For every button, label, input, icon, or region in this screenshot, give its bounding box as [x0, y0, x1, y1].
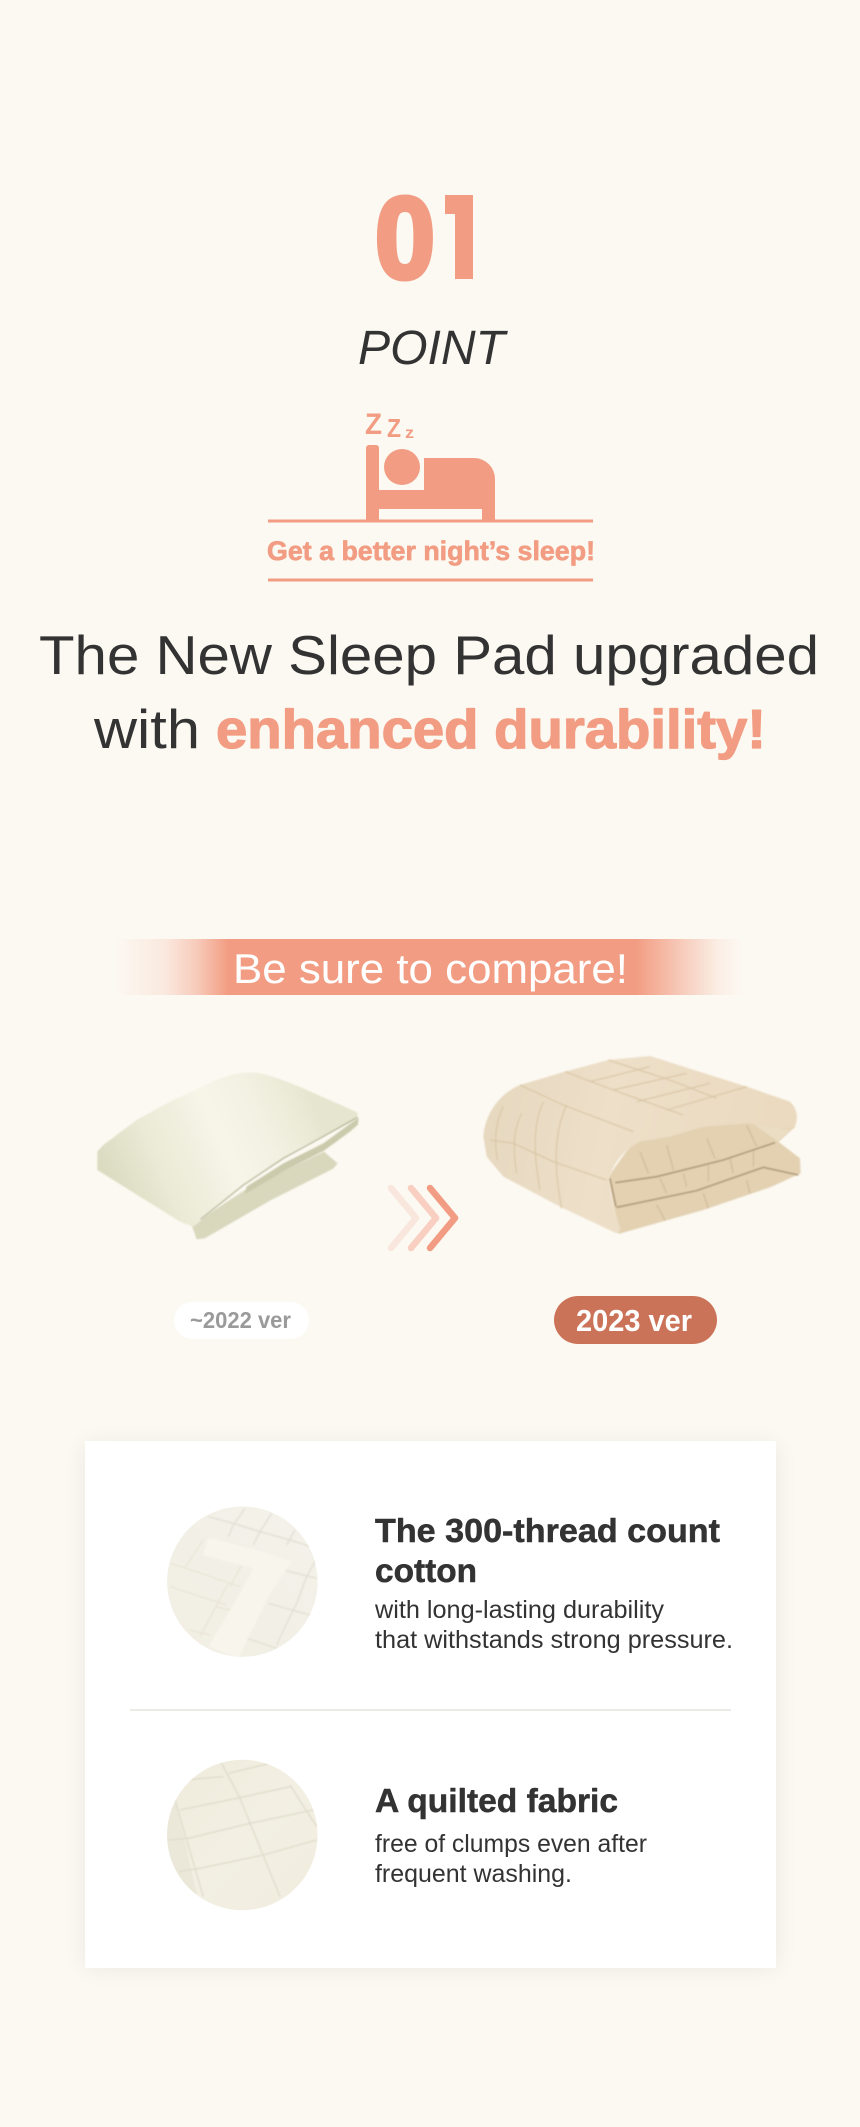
label: 2022 version pill: ~2022 ver [190, 1307, 291, 1333]
tagline with rules [267, 520, 595, 582]
feature text: 300-thread count cotton: with long-lasting durability [374, 1596, 664, 1624]
icon: sleeping person in bed: Z [387, 413, 401, 443]
main heading: with [93, 698, 200, 760]
photo: 2022 sleep pad [97, 1072, 359, 1239]
feature text: 300-thread count cotton [374, 1512, 733, 1654]
label: 2023 version pill: 2023 ver [576, 1303, 692, 1338]
main heading: enhanced durability! [216, 698, 766, 760]
icon: sleeping person in bed: Z [365, 408, 382, 441]
feature text: quilted fabric [375, 1782, 647, 1888]
icon: sleeping person in bed: z [405, 425, 414, 442]
main heading: The New Sleep Pad upgraded [39, 624, 819, 686]
panel: feature card [85, 1441, 776, 1968]
point label: POINT [358, 322, 509, 375]
feature text: 300-thread count cotton: cotton [375, 1552, 477, 1589]
feature text: 300-thread count cotton: that withstands strong pressure. [375, 1626, 733, 1654]
feature text: quilted fabric: free of clumps even after [375, 1830, 647, 1858]
section number: 1 [441, 173, 485, 303]
icon: sleeping person in bed [365, 408, 495, 521]
feature text: quilted fabric: A quilted fabric [375, 1782, 618, 1819]
compare banner: Be sure to compare! [233, 945, 628, 992]
section number: 0 [375, 173, 435, 303]
photo: 2023 quilted sleep pad [483, 1056, 801, 1234]
label: 2022 version pill [174, 1302, 309, 1339]
section number [376, 194, 473, 282]
feature image: quilted fabric [160, 1760, 318, 1910]
feature text: quilted fabric: frequent washing. [375, 1860, 572, 1888]
feature text: 300-thread count cotton: The 300-thread count [375, 1512, 720, 1549]
label: 2023 version pill [554, 1296, 717, 1344]
compare banner [115, 939, 743, 995]
tagline with rules: Get a better night’s sleep! [267, 536, 595, 566]
icon: triple chevron arrow [391, 1188, 455, 1248]
main heading [39, 624, 819, 760]
feature image: thread count fabric [167, 1506, 318, 1658]
